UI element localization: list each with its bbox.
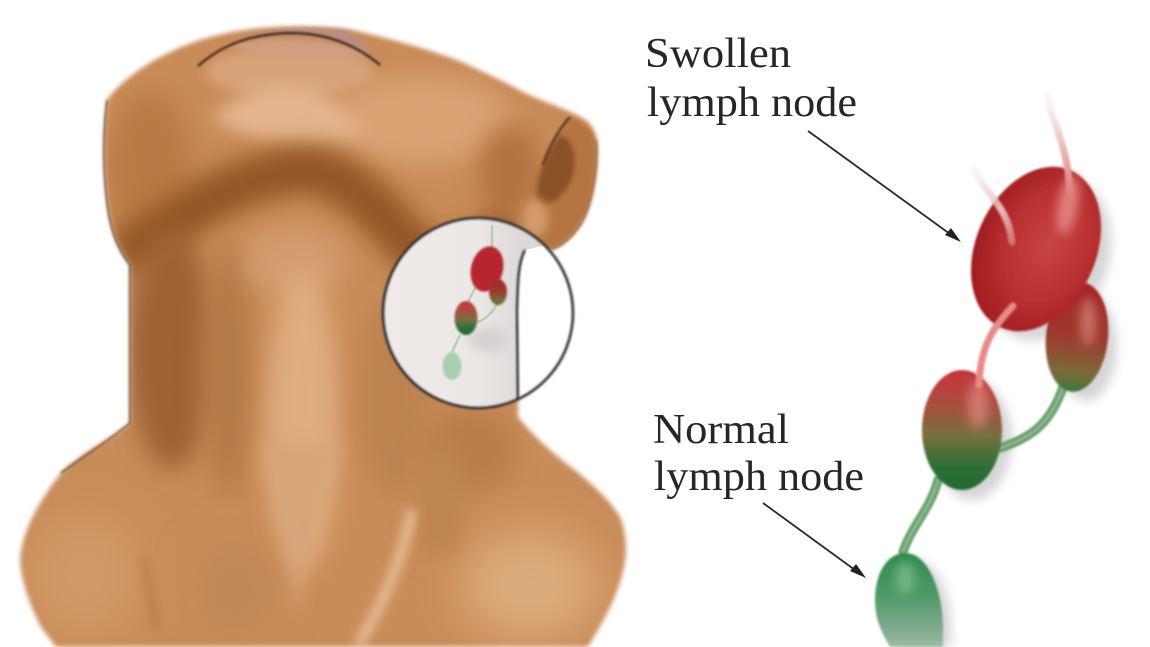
label: normal: Normal bbox=[653, 407, 789, 453]
skin and shading bbox=[0, 0, 650, 647]
enlarged lymph node chain bbox=[875, 94, 1133, 647]
neck illustration bbox=[0, 0, 650, 647]
green connector vessels bbox=[903, 387, 1063, 552]
mini normal node bbox=[442, 352, 462, 380]
mini node shadow bbox=[468, 328, 508, 352]
pink vessels bbox=[973, 94, 1070, 385]
white area right of neck bbox=[517, 246, 573, 398]
label: swollen: Swollen bbox=[645, 31, 791, 77]
mini swollen node bbox=[468, 244, 506, 294]
lips bbox=[198, 28, 380, 66]
mini right node bbox=[489, 279, 507, 305]
swollen node bbox=[946, 146, 1126, 352]
magnifier circle inset bbox=[383, 218, 590, 410]
label: swollen lymph node second line: lymph node bbox=[647, 80, 857, 126]
normal node bbox=[875, 553, 943, 647]
neck and jaw outline bbox=[61, 100, 130, 473]
arrow: to normal node bbox=[763, 503, 866, 578]
ear bbox=[518, 117, 596, 249]
mini middle node bbox=[454, 301, 478, 335]
mini vessels bbox=[452, 225, 498, 352]
middle node bbox=[922, 370, 1002, 490]
label: normal lymph node second line: lymph node bbox=[654, 454, 864, 500]
arrow: to swollen node bbox=[808, 131, 961, 242]
right node bbox=[1040, 279, 1114, 395]
node drop shadows bbox=[885, 157, 1133, 647]
